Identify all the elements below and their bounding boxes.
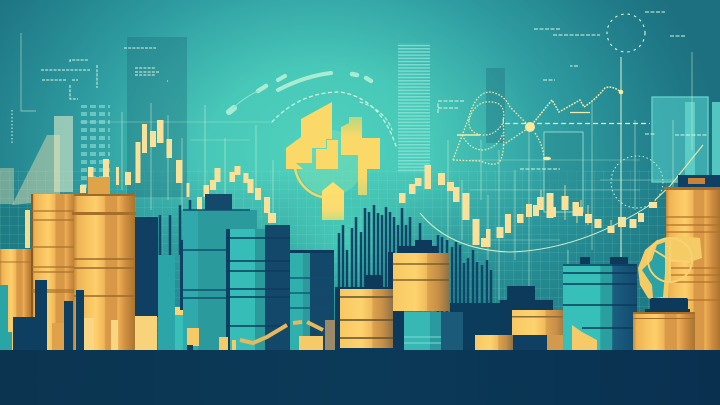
gear ring xyxy=(648,238,692,282)
pill right xyxy=(352,74,357,75)
right-center barrels xyxy=(475,257,637,350)
ring xyxy=(297,130,363,196)
center-left gold barrel xyxy=(335,287,404,350)
candlestick chart left xyxy=(80,120,276,223)
dark spikes behind barrels xyxy=(160,200,491,350)
low dark slab xyxy=(513,335,547,350)
dark stack xyxy=(500,286,553,350)
triangle curve xyxy=(453,92,530,160)
center gold barrels xyxy=(335,240,463,350)
right large barrel xyxy=(664,187,720,350)
silhouette buildings xyxy=(13,280,84,350)
dark tower xyxy=(135,217,158,317)
low gold slab xyxy=(475,335,513,350)
left cream bar xyxy=(25,210,30,248)
shorter teal barrel xyxy=(290,250,334,350)
small lid xyxy=(365,275,383,287)
striped building xyxy=(544,132,583,212)
pill far right xyxy=(366,78,371,81)
teal strip far left xyxy=(0,285,8,350)
barrel lid cube xyxy=(88,177,110,194)
dashed arc inner xyxy=(360,102,392,130)
right block xyxy=(341,117,380,195)
lid knob left xyxy=(580,257,590,264)
thick arc xyxy=(278,73,331,90)
right building inner column xyxy=(685,102,695,182)
rising arrow line xyxy=(655,145,703,200)
teal barrels xyxy=(180,194,335,350)
end dot xyxy=(619,90,623,94)
yellow market icon with ring xyxy=(286,102,380,220)
pill near arc xyxy=(258,86,266,91)
low right gold barrel xyxy=(633,312,695,350)
gold blocks at base xyxy=(187,320,335,350)
base line of triangle xyxy=(453,117,504,164)
pill left xyxy=(229,108,234,112)
barrel shadow strip xyxy=(567,310,572,350)
ground band xyxy=(0,350,720,405)
gear spokes xyxy=(654,240,690,283)
pill upper xyxy=(278,76,285,80)
teal block xyxy=(158,255,175,350)
gear opening xyxy=(642,242,665,298)
ring arc xyxy=(295,168,322,197)
right building frame xyxy=(652,97,708,182)
gold wedge xyxy=(572,325,597,350)
lid top xyxy=(398,246,438,253)
dashed circle xyxy=(607,14,645,52)
window tower xyxy=(80,105,110,190)
cream block xyxy=(135,316,157,350)
barrel far left xyxy=(0,249,32,350)
large teal barrel xyxy=(563,264,637,350)
pseudo data marks xyxy=(12,12,707,169)
right barrel lid xyxy=(678,175,720,187)
teal column xyxy=(175,315,187,350)
left barrels group xyxy=(0,177,136,350)
long lower curve xyxy=(420,205,650,252)
rising price line xyxy=(530,87,621,127)
lid knob xyxy=(415,240,432,247)
left block xyxy=(286,102,332,169)
descending tail xyxy=(535,133,544,158)
pale slope xyxy=(12,135,60,205)
solid bar xyxy=(457,134,480,136)
link to hub xyxy=(503,127,530,145)
teal barrel lid xyxy=(205,194,232,210)
barrel third, large xyxy=(72,194,136,350)
lower loop xyxy=(462,133,503,150)
lower background shade with grid xyxy=(0,165,720,350)
background skyline xyxy=(0,37,720,212)
dark translucent tower xyxy=(127,37,187,197)
back teal barrel xyxy=(180,210,257,350)
teal low drum xyxy=(404,312,463,350)
lid base strip xyxy=(645,309,690,312)
thin chart lines xyxy=(21,33,700,350)
barrel second xyxy=(31,194,78,350)
step block xyxy=(316,140,338,169)
base gold ribbon xyxy=(240,322,323,343)
dark narrow tower xyxy=(486,68,505,143)
mid-left towers xyxy=(135,217,187,350)
dashed horizontal xyxy=(505,122,650,124)
gear blob xyxy=(638,236,702,303)
chart hub dots xyxy=(525,90,623,160)
big hub dot xyxy=(525,122,535,132)
tail dot xyxy=(543,157,551,160)
stacked gold barrel xyxy=(388,252,449,311)
thin fading arc xyxy=(233,91,258,108)
striped tower xyxy=(398,43,430,173)
dotted line chart xyxy=(420,14,703,252)
house block xyxy=(322,182,344,220)
lid knob right xyxy=(610,257,628,264)
pale tower xyxy=(54,116,73,192)
small left blocks xyxy=(0,168,14,204)
candlestick chart right xyxy=(399,165,657,247)
right lid chip xyxy=(688,178,705,184)
teal strip small xyxy=(8,332,12,350)
far right building xyxy=(712,102,720,182)
darker panel xyxy=(52,323,64,350)
dark block behind right of spikes xyxy=(450,303,500,350)
small bar xyxy=(570,112,590,114)
low right barrel lid xyxy=(650,298,688,310)
gold barrel xyxy=(512,310,567,350)
cream cap xyxy=(175,307,187,315)
tall teal barrel xyxy=(226,225,290,350)
upper loop xyxy=(469,102,504,135)
dashed arc xyxy=(272,92,396,146)
arc decorations xyxy=(229,73,396,146)
pale windows on barrels xyxy=(84,318,118,350)
icon: gear xyxy=(638,236,702,303)
dotted gauge xyxy=(611,156,663,208)
